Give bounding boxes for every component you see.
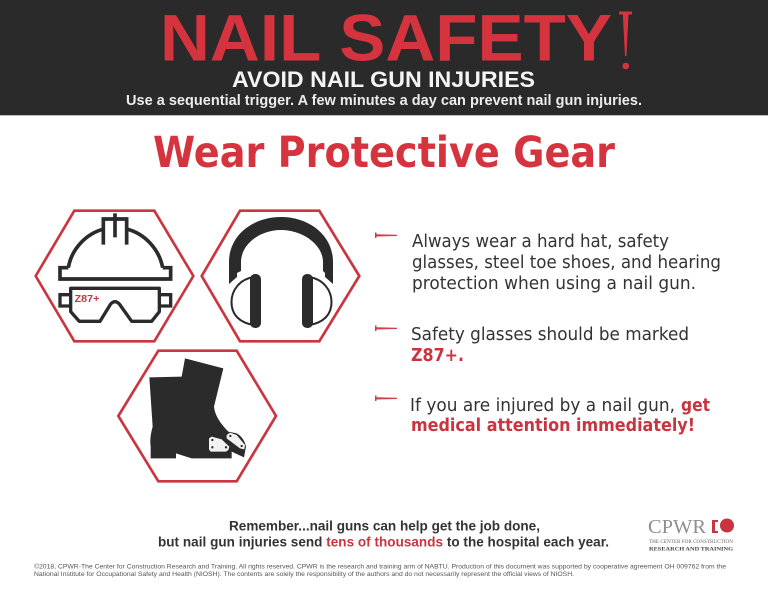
icon: right ear cup [302,274,332,328]
rivets [211,435,243,448]
fine print [34,562,726,578]
panel: hearing protection icon [202,211,359,341]
icon: steel toe plates [209,433,245,452]
icon: nail bullet [375,326,397,331]
closing message: but nail gun injuries send tens of thousands to the hospital each year. [158,534,609,550]
bullet text 3: get [681,395,710,416]
icon: left ear cup [232,274,261,328]
bullet text 3 [410,395,710,436]
bullet 3 [375,395,710,436]
closing message [158,518,609,550]
subtitle: AVOID NAIL GUN INJURIES [232,67,535,92]
panel: steel toe boots icon [118,351,276,481]
bullet text 3: If you are injured by a nail gun, [410,395,675,416]
icon: hard hat [60,213,171,279]
icon: nail bullet [375,396,397,401]
fine print: ©2018, CPWR-The Center for Construction Research and Training. All rights reserved. CPWR is the research and training arm of NABTU. Production of this document was supported by cooperative agreement OH 009762 from the [34,562,726,570]
bullet text 1 [412,231,721,294]
icon: boots [149,358,246,458]
icon: headphone band [229,217,333,284]
logo: CPWR: RESEARCH AND TRAINING [649,546,733,552]
closing message: Remember...nail guns can help get the job done, [229,518,540,534]
bullet text 1: glasses, steel toe shoes, and hearing [412,252,721,273]
logo: CPWR [648,516,734,552]
bullet 2 [375,324,689,366]
bullet text 1: protection when using a nail gun. [412,273,696,294]
bullet text 3: medical attention immediately! [411,415,695,436]
header band [0,0,768,116]
fine print: National Institute for Occupational Safety and Health (NIOSH). The contents are solely the responsibility of the authors and do not necessarily represent the official views of NIOSH. [34,571,574,578]
bullet 1 [375,231,721,294]
bullet text 2: Safety glasses should be marked [411,324,689,345]
bullet text 2 [411,324,689,366]
icon: safety goggles [60,288,171,321]
Z87+ mark: Z87+ [75,294,100,305]
bullet text 1: Always wear a hard hat, safety [412,231,669,252]
title: NAIL SAFETY [160,0,612,74]
panel: hard hat and goggles icon [36,211,193,341]
heading: Wear Protective Gear [153,128,616,178]
bullet text 2: Z87+. [411,345,464,366]
logo: CPWR: CPWR [648,516,707,538]
tagline: Use a sequential trigger. A few minutes a day can prevent nail gun injuries. [126,93,642,109]
logo: CPWR: THE CENTER FOR CONSTRUCTION [649,540,734,545]
icon: nail bullet [375,232,397,238]
icon: nail exclamation mark [619,12,632,69]
